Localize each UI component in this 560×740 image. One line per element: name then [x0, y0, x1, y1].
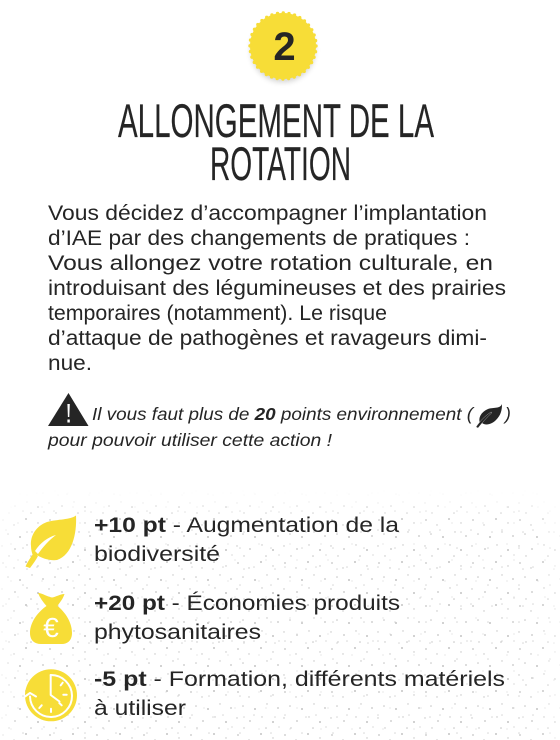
label: +10 pt: +10 pt - Augmentation de la — [94, 513, 399, 537]
label: +10 pt — [94, 513, 399, 566]
warning text: pour pouvoir utiliser cette action ! — [47, 430, 332, 450]
icon: euro money bag — [30, 593, 72, 644]
label: +20 pt — [94, 590, 400, 644]
label: -5 pt: -5 pt - Formation, différents matériels — [94, 667, 505, 691]
label: -5 pt: à utiliser — [94, 696, 186, 720]
body text: d’attaque de pathogènes et ravageurs dimi- — [48, 326, 487, 350]
title — [118, 94, 434, 190]
badge: number 2 — [250, 13, 316, 82]
icon: small dark leaf — [476, 404, 502, 428]
body text: introduisant des légumineuses et des prairies — [48, 276, 506, 300]
title: ROTATION — [210, 137, 351, 190]
label: +20 pt: phytosanitaires — [94, 620, 261, 644]
body text: nue. — [48, 351, 92, 375]
body text: temporaires (notamment). Le risque — [48, 301, 387, 325]
label: +10 pt: biodiversité — [94, 542, 220, 566]
label: +20 pt: +20 pt - Économies produits — [94, 590, 400, 615]
body text — [48, 201, 506, 375]
body text: Vous décidez d’accompagner l’implantation — [48, 201, 487, 225]
row: training — [25, 667, 505, 721]
icon: warning triangle — [48, 393, 88, 426]
icon: clock — [25, 669, 77, 721]
background: dotted texture — [0, 490, 560, 740]
label: -5 pt — [94, 667, 505, 720]
icon: yellow leaf — [26, 516, 76, 568]
badge: number 2: 2 — [273, 25, 296, 69]
body text: Vous allongez votre rotation culturale, en — [48, 251, 493, 275]
warning text: ) — [503, 404, 511, 424]
warning text — [47, 404, 511, 450]
row: biodiversity — [26, 513, 399, 568]
warning text: Il vous faut plus de 20 points environnement ( — [92, 404, 475, 424]
icon: euro money bag: € — [43, 612, 59, 643]
body text: d’IAE par des changements de pratiques : — [48, 226, 470, 250]
row: savings — [30, 590, 400, 644]
